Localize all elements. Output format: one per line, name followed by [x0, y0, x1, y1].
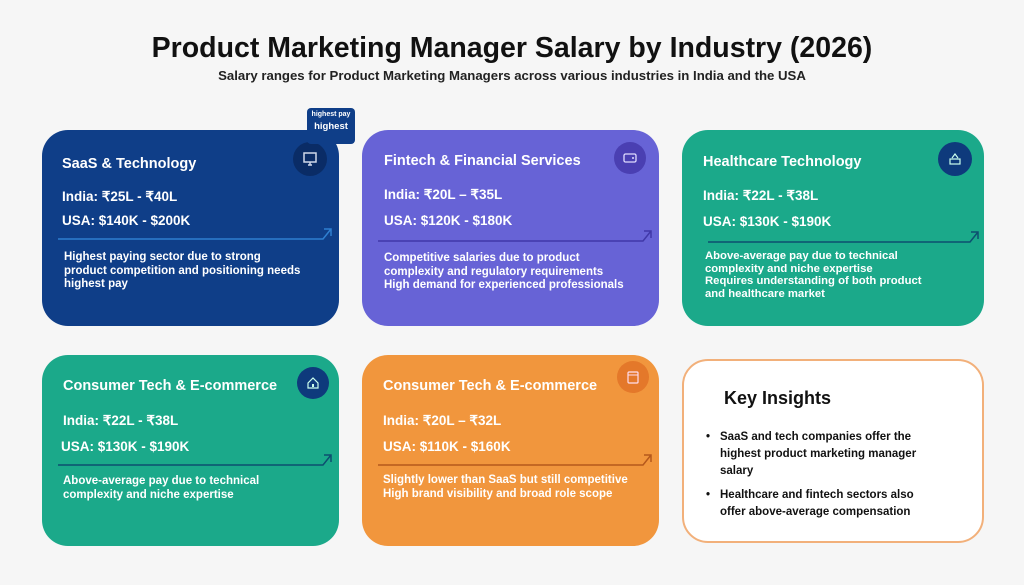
heading: Consumer Tech & E-commerce	[63, 378, 277, 394]
USA salary: USA: $130K - $190K	[703, 214, 831, 229]
arrow line	[708, 231, 979, 243]
description	[705, 250, 922, 300]
arrow line	[58, 228, 332, 240]
India salary: India: ₹22L - ₹38L	[703, 188, 818, 203]
description	[384, 252, 624, 291]
India salary: India: ₹22L - ₹38L	[63, 413, 178, 428]
description: complexity and niche expertise	[705, 262, 873, 274]
description: Slightly lower than SaaS but still competitive	[383, 474, 628, 486]
description	[383, 474, 628, 500]
India salary: India: ₹20L – ₹32L	[383, 413, 501, 428]
arrow line	[378, 230, 652, 242]
description: complexity and regulatory requirements	[384, 266, 603, 278]
heading: Fintech & Financial Services	[384, 153, 581, 169]
India salary: India: ₹25L - ₹40L	[62, 189, 177, 204]
panel: SaaS & Technology	[42, 130, 339, 326]
arrow line	[378, 454, 652, 466]
description: Above-average pay due to technical	[705, 250, 898, 262]
badge: highest pay: highest	[314, 121, 348, 132]
description: Above-average pay due to technical	[63, 475, 259, 487]
icon: bag	[617, 361, 649, 393]
bullet list	[706, 431, 916, 518]
arrow line	[58, 454, 332, 466]
description: Highest paying sector due to strong	[64, 251, 261, 263]
panel: Key Insights	[682, 359, 984, 543]
bullet list: highest product marketing manager	[720, 448, 916, 460]
description	[64, 251, 300, 290]
USA salary: USA: $140K - $200K	[62, 213, 190, 228]
icon: hospital	[938, 142, 972, 176]
icon: house	[297, 367, 329, 399]
description: and healthcare market	[705, 288, 825, 300]
description: Requires understanding of both product	[705, 275, 922, 287]
description: Competitive salaries due to product	[384, 252, 580, 264]
description: High demand for experienced professionals	[384, 279, 624, 291]
heading: SaaS & Technology	[62, 156, 196, 172]
title: Product Marketing Manager Salary by Industry (2026)	[152, 32, 872, 64]
bullet list: •	[706, 431, 710, 443]
USA salary: USA: $120K - $180K	[384, 213, 512, 228]
USA salary: USA: $130K - $190K	[61, 439, 189, 454]
panel: Consumer Tech (orange)	[362, 355, 659, 546]
India salary: India: ₹20L – ₹35L	[384, 187, 502, 202]
panel: Consumer Tech (teal)	[42, 355, 339, 546]
badge: highest pay: highest pay	[312, 111, 350, 118]
description: High brand visibility and broad role scope	[383, 488, 612, 500]
badge: highest pay	[307, 108, 355, 144]
heading: Consumer Tech & E-commerce	[383, 378, 597, 394]
bullet list: SaaS and tech companies offer the	[720, 431, 911, 443]
icon: monitor	[293, 142, 327, 176]
subtitle: Salary ranges for Product Marketing Managers across various industries in India and the USA	[218, 68, 806, 83]
USA salary: USA: $110K - $160K	[383, 439, 511, 454]
description: product competition and positioning needs	[64, 264, 300, 276]
description: highest pay	[64, 278, 128, 290]
panel: Healthcare Technology	[682, 130, 984, 326]
bullet list: salary	[720, 465, 753, 477]
bullet list: offer above-average compensation	[720, 506, 910, 518]
panel: Fintech	[362, 130, 659, 326]
description: complexity and niche expertise	[63, 488, 234, 500]
heading: Healthcare Technology	[703, 154, 861, 170]
heading: Key Insights	[724, 388, 831, 408]
bullet list: •	[706, 489, 710, 501]
icon: wallet	[614, 142, 646, 174]
description	[63, 475, 259, 500]
bullet list: Healthcare and fintech sectors also	[720, 489, 914, 501]
